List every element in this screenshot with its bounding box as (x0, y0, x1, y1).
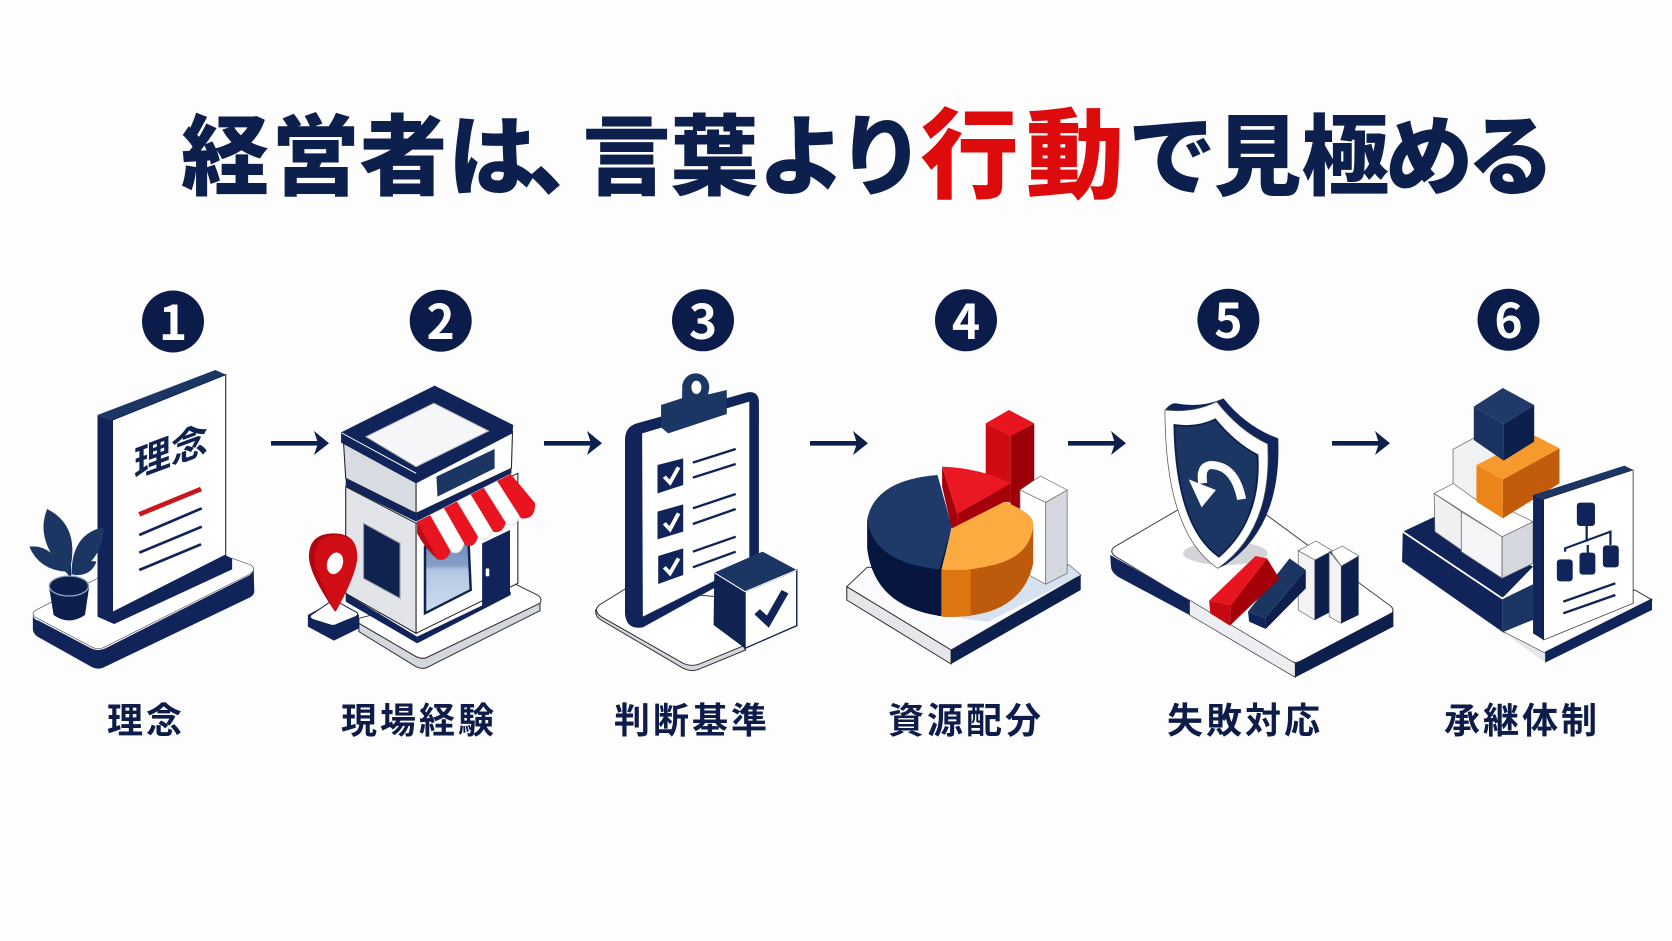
upright blocks (1298, 541, 1359, 623)
label: 判断基準: 判断基準 (614, 692, 770, 744)
shield plate (1110, 483, 1393, 677)
white bar (1020, 476, 1067, 584)
number badge 6: 6 (1494, 282, 1523, 352)
number badge 3: 3 (689, 283, 717, 353)
number badge 4 (935, 283, 997, 353)
board (97, 370, 232, 624)
navy pie slice (867, 475, 952, 616)
navy cube (1474, 388, 1534, 461)
icon: stacked blocks and org chart (1402, 388, 1652, 663)
blocks plate (1503, 590, 1652, 663)
fallen navy block (1248, 558, 1306, 629)
undo arrow (1189, 465, 1242, 507)
label: 資源配分: 資源配分 (888, 692, 1044, 744)
plant (29, 509, 104, 620)
shield (1165, 398, 1278, 568)
white cubes (1434, 437, 1533, 578)
icon: 理念 board with plant (29, 370, 254, 669)
title (181, 77, 1555, 219)
clip (661, 373, 727, 433)
check cube (714, 552, 797, 648)
number badge 6 (1478, 282, 1540, 352)
store building (344, 432, 518, 643)
checklist (657, 449, 736, 584)
icon: store with map pin (308, 386, 541, 668)
title: 経営者は、言葉より (181, 87, 925, 214)
icon: clipboard checklist (596, 373, 797, 670)
icon: pie and bar chart (847, 410, 1081, 664)
arrow 5 (1332, 431, 1390, 455)
board text: 理念: 理念 (134, 409, 208, 490)
icon: shield with dominoes (1110, 398, 1393, 677)
number badge 2 (410, 283, 472, 353)
red pie slice (942, 467, 1011, 528)
store roof (341, 386, 513, 483)
number badge 4: 4 (952, 283, 980, 353)
navy platform (1402, 517, 1533, 632)
title highlight: 行動: 行動 (920, 77, 1124, 219)
store plate (359, 580, 541, 668)
number badge 1 (142, 284, 204, 354)
number badge 1: 1 (159, 284, 187, 354)
arrow 4 (1068, 431, 1126, 455)
label: 失敗対応: 失敗対応 (1167, 692, 1323, 744)
fallen red block (1209, 556, 1279, 626)
orange pie slice (941, 502, 1033, 617)
orange block (1476, 436, 1559, 518)
arrow 2 (544, 431, 602, 455)
clipboard plate (596, 588, 789, 670)
chart plate (847, 565, 1081, 664)
number badge 3 (672, 283, 734, 353)
map pin (308, 533, 359, 641)
clipboard board (625, 392, 759, 628)
awning (417, 474, 535, 560)
number badge 2: 2 (427, 283, 455, 353)
red bar (986, 410, 1034, 513)
label: 現場経験: 現場経験 (341, 692, 497, 744)
number badge 5: 5 (1214, 282, 1243, 352)
arrow 3 (810, 431, 868, 455)
arrow 1 (271, 431, 329, 455)
label: 理念: 理念 (107, 692, 185, 744)
org chart document (1533, 466, 1633, 640)
plate (33, 557, 254, 669)
number badge 5 (1197, 282, 1259, 352)
label: 承継体制: 承継体制 (1444, 692, 1600, 744)
title: で見極める (1128, 87, 1555, 214)
